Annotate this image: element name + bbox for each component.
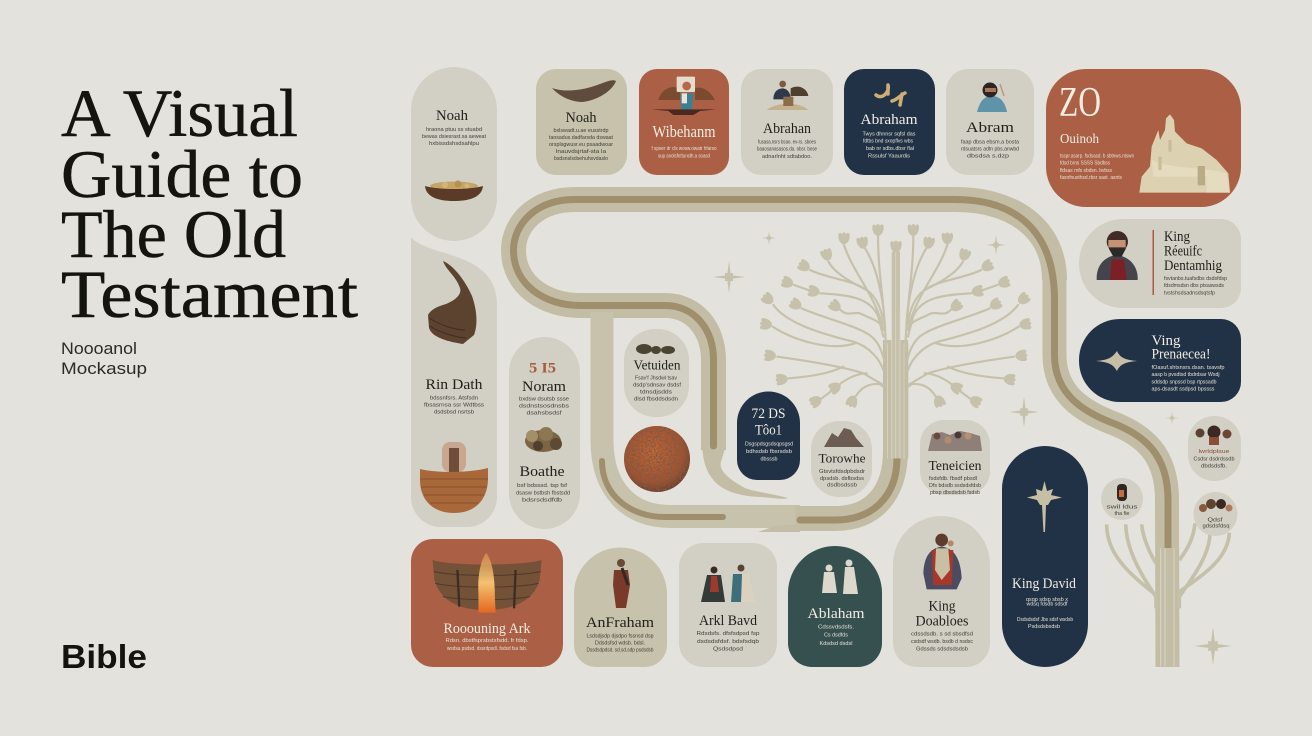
heading: King David bbox=[1012, 576, 1076, 592]
body text: Dsgspdsgsdsqpsgsd bbox=[745, 442, 793, 448]
icon: man and animal bbox=[767, 81, 808, 110]
icon: guiding star bbox=[1027, 481, 1062, 532]
body text: fdsdmsdsn dbs ptsaswsds bbox=[1164, 283, 1224, 289]
body text: dbdsdsfb. bbox=[1201, 464, 1227, 470]
panel: small circle right bbox=[1194, 492, 1238, 536]
body text: adnarlnht sdtabdoo. bbox=[762, 154, 812, 160]
panel: Teneicien card bbox=[920, 420, 990, 496]
title: The Old bbox=[61, 196, 286, 272]
icon: burning ark bbox=[433, 553, 542, 613]
body text: dbsdsa s.dzp bbox=[967, 154, 1009, 160]
heading: Wibehanm bbox=[652, 122, 716, 141]
panel: 72 DS navy card bbox=[737, 392, 800, 480]
icon: figure with wings bbox=[652, 77, 717, 115]
icon: figures group bbox=[824, 428, 864, 447]
body text: sup anolsfnttunsth.a soasd bbox=[658, 154, 710, 160]
panel: Ving navy card bbox=[1079, 319, 1241, 402]
title: Guide to bbox=[61, 136, 303, 212]
heading: Boathe bbox=[520, 464, 565, 480]
heading: Ablaham bbox=[808, 606, 865, 622]
body text bbox=[1164, 276, 1227, 296]
accent rule bbox=[1152, 230, 1154, 295]
heading: Prenaecea! bbox=[1152, 346, 1210, 362]
body text: bdhsdsb fbsrsdsb bbox=[746, 449, 792, 455]
body text: dsasw bstbsh fbstsdd bbox=[516, 490, 570, 496]
panel: King Doabloes card bbox=[893, 516, 990, 667]
big number: ZO bbox=[1059, 80, 1101, 126]
panel: King David navy pill bbox=[1002, 446, 1088, 667]
body text: Dsdsdsdsf Jbs sdsf wsdsb bbox=[1017, 617, 1073, 623]
body text: dsahsbsdsf bbox=[526, 410, 562, 416]
heading: Ving bbox=[1152, 333, 1181, 349]
body text: fOasuf.shtsnsrs.dsan. tsavsfp bbox=[1152, 365, 1224, 371]
icon: temple building bbox=[1139, 114, 1230, 193]
icon: crowd of people bbox=[928, 431, 982, 451]
body text: bxdsw dsutsb ssse bbox=[519, 396, 569, 402]
body text: orsplsgwusr.eu psaadwoar bbox=[549, 142, 613, 148]
body text bbox=[1106, 504, 1138, 517]
title bbox=[61, 75, 358, 332]
body text bbox=[819, 469, 865, 488]
icon: small plants bbox=[636, 344, 675, 354]
body text: fusasa.nsrs bsao. ev-rs. sboes bbox=[758, 140, 816, 146]
body text: Csdsr dsdrdssdb bbox=[1194, 456, 1234, 462]
icon: group of heads bbox=[1199, 499, 1232, 512]
heading: King bbox=[928, 598, 956, 614]
body text: dsdnstsosdnsbs bbox=[519, 404, 569, 410]
body text: Qdsf bbox=[1208, 518, 1223, 524]
body text: Ddsdsfsd wdsb. bdsl. bbox=[595, 640, 645, 646]
panel: ZO terracotta card bbox=[1046, 69, 1241, 207]
body text bbox=[549, 128, 613, 162]
body text: dsdp'sdnsav dsdsf bbox=[633, 382, 681, 388]
panel: Abraham navy card bbox=[844, 69, 935, 175]
body text: baaosanasasos.da. obsr. bose bbox=[757, 146, 817, 152]
icon: portrait bbox=[1117, 484, 1127, 501]
body text bbox=[929, 476, 981, 496]
body text bbox=[1194, 449, 1234, 470]
body text: Rdsn. dbstfsprsbstsfsdd. fr fdsp. bbox=[446, 638, 529, 644]
body text: Gdssds sdsdsdsdsb bbox=[916, 646, 968, 652]
body text bbox=[862, 132, 916, 160]
body text: Lsdsdjsdp djsdpo fssnsd dsp bbox=[586, 634, 654, 640]
body text: csdsdf wsdb. bsdb d nsdsc bbox=[911, 639, 973, 645]
title: Testament bbox=[61, 256, 358, 332]
body text bbox=[818, 624, 854, 647]
heading: Arkl Bavd bbox=[699, 613, 757, 629]
body text bbox=[1202, 518, 1230, 530]
body text: bsdsnslsdsehuhsvdaslo bbox=[554, 156, 608, 162]
heading: Rooouning Ark bbox=[444, 621, 531, 637]
body text bbox=[745, 442, 793, 462]
body text: fdtbs bnd sxopflvs wbs bbox=[863, 138, 913, 144]
panel: Noram pill bbox=[509, 337, 580, 529]
body text: Rdsdsfs. dfsfsdpsd fsp bbox=[696, 631, 760, 637]
heading: Abrahan bbox=[763, 121, 811, 137]
body text: tha fie bbox=[1114, 511, 1130, 517]
body text: cdssdsdb. s sd sbsdfsd bbox=[911, 632, 973, 638]
body text bbox=[911, 632, 973, 652]
body text: pbsp dbsdsdsb fsdsb bbox=[930, 490, 980, 496]
body text: dsdsdsfdsf. bdsfsdqb bbox=[697, 639, 759, 645]
body text: wsdsa psdsd. dssrdpsdl. fsdsd fsa fsb. bbox=[446, 646, 527, 652]
panel: Vetuiden pill bbox=[624, 329, 689, 417]
body text: Kdsdsd dsdsl bbox=[820, 641, 852, 647]
brand: Bible: Bible bbox=[61, 638, 147, 675]
subtitle: Mockasup bbox=[61, 360, 147, 378]
heading bbox=[1164, 229, 1222, 274]
panel: King portrait card bbox=[1079, 219, 1241, 308]
icon: two white figures bbox=[822, 560, 858, 594]
subtitle bbox=[61, 340, 147, 378]
body text: Cs dsdfds bbox=[824, 632, 848, 638]
panel: Abrahan card bbox=[741, 69, 833, 175]
numerals: 72 DS bbox=[752, 406, 786, 422]
panel: Noah pill bbox=[411, 67, 497, 241]
body text: Dfs bdsdb ssdsdsfdsb bbox=[929, 483, 981, 489]
icon: wooden canoe bbox=[552, 80, 616, 102]
panel: Abram card bbox=[946, 69, 1034, 175]
title: A Visual bbox=[61, 75, 298, 151]
icon: wooden ark bbox=[420, 442, 488, 513]
body text: qsqp sdsp sbsb x bbox=[1026, 597, 1068, 603]
numerals: 5 I5 bbox=[529, 360, 556, 376]
body text bbox=[696, 631, 760, 652]
icon: group of heads bbox=[1196, 426, 1232, 445]
body text: bdssnfsrs. Atsfsdn bbox=[430, 396, 478, 402]
body text: bdsrsdsdfdb bbox=[522, 498, 562, 504]
body text: Rssulsf Yaaurdis bbox=[868, 154, 910, 160]
panel: Ablaham teal card bbox=[788, 546, 882, 667]
body text: fldsas rnfs sbdsn. bvbss bbox=[1060, 168, 1112, 174]
heading: Teneicien bbox=[928, 458, 982, 473]
panel: small circle left bbox=[1101, 478, 1143, 520]
body text: fdsd brns SSSS Sbdbss bbox=[1060, 160, 1110, 166]
body text: lwrldplsue bbox=[1198, 449, 1230, 455]
body text: taosadus.dadfarsda dswaat bbox=[549, 135, 613, 141]
body text: aps-dsasdt ssdpsd bpssss bbox=[1152, 386, 1215, 392]
panel: Rin Dath tall card bbox=[411, 237, 497, 527]
body text: tvstshsdsadnsdsqtsfp bbox=[1164, 290, 1215, 296]
body text bbox=[633, 376, 681, 402]
subtitle: Noooanol bbox=[61, 340, 137, 358]
tree of life bbox=[759, 224, 1032, 458]
heading: Rin Dath bbox=[426, 377, 483, 393]
body text bbox=[446, 638, 529, 652]
icon: textured sphere bbox=[624, 426, 690, 492]
panel: Roouning Ark card bbox=[411, 539, 563, 667]
body text bbox=[1017, 597, 1073, 630]
body text: tdnsdjsdds bbox=[640, 390, 672, 396]
body text bbox=[516, 483, 570, 504]
heading: Noah bbox=[566, 110, 597, 126]
icon: star bbox=[1096, 351, 1137, 371]
panel: Wibehanm card bbox=[639, 69, 729, 175]
icon: bowl of food bbox=[425, 180, 483, 201]
body text: hraona ptuu ss stuabd bbox=[426, 127, 482, 133]
body text: Psdsdsbsdsb bbox=[1028, 624, 1060, 630]
lower-right branching trunk bbox=[1107, 523, 1229, 667]
body text: rdsuatsrs adtn pbs.anwbd bbox=[961, 146, 1019, 152]
body text: dsdbsdssb bbox=[827, 482, 857, 488]
heading bbox=[1152, 333, 1210, 362]
body text: Cdssvdsdsfs. bbox=[818, 624, 854, 630]
body text bbox=[757, 140, 817, 160]
icon: robed figure bbox=[923, 534, 962, 589]
icon: portrait bbox=[1097, 231, 1138, 280]
icon: standing figure bbox=[613, 559, 630, 608]
icon: herb cluster bbox=[525, 427, 562, 452]
body text: fbsasrnsa ssr Wdtbss bbox=[424, 402, 484, 408]
body text: tsspr.asarp. fsdsasd. b sbtnws.ntswn bbox=[1060, 154, 1134, 160]
body text bbox=[424, 396, 484, 416]
body text: Gtsvtsfdsdpbdsdr bbox=[819, 469, 865, 475]
body text: hxbissdshsdsahlpu bbox=[429, 141, 479, 147]
panel: Arkl Bavd card bbox=[679, 543, 777, 667]
body text: dlsd fbsddsdsdn bbox=[634, 396, 678, 402]
body text: Qsdsdpsd bbox=[713, 646, 743, 652]
heading: Ouinoh bbox=[1060, 132, 1099, 147]
body text bbox=[1060, 154, 1134, 181]
heading: AnFraham bbox=[586, 615, 654, 631]
winding road path bbox=[514, 200, 1168, 667]
heading: Noah bbox=[436, 108, 468, 124]
heading: Abraham bbox=[860, 112, 918, 128]
body text bbox=[422, 127, 486, 147]
heading: Réeuifc bbox=[1164, 244, 1202, 260]
heading bbox=[916, 598, 969, 630]
body text: dpsdsb. dsfbsdss bbox=[820, 476, 864, 482]
body text: swil ldus bbox=[1106, 504, 1138, 510]
heading: Tôo1 bbox=[755, 422, 782, 438]
body text: Fsav'f Jhsdwl tsav bbox=[635, 376, 677, 382]
panel: Torowhe card bbox=[811, 421, 872, 497]
heading: Abram bbox=[966, 120, 1014, 136]
icon: two figures bbox=[701, 564, 755, 602]
panel: AnFraham card bbox=[574, 548, 667, 667]
heading: King bbox=[1164, 229, 1190, 245]
body text bbox=[519, 396, 569, 416]
body text: bab nr sdbs.dbsr flal bbox=[866, 146, 914, 152]
body text: Dssdsdpdsd. sd.sd.sdp psdsdsb bbox=[586, 648, 654, 654]
body text: fsdsfdb. fbsdf pbsdl bbox=[929, 476, 977, 482]
body text: bewas dsiesrast.sa aeweat bbox=[422, 134, 486, 140]
body text bbox=[1152, 365, 1224, 392]
icon: gold figures bbox=[876, 85, 905, 105]
body text: bxlswadt.u.ae eusstrdp bbox=[554, 128, 608, 134]
body text: gdsdsfdsq bbox=[1202, 524, 1230, 530]
body text: fsvtanbs.tuafsdbs dsdsfdsp bbox=[1164, 276, 1227, 282]
decorative star cluster bbox=[713, 231, 1232, 665]
heading: Torowhe bbox=[818, 450, 866, 466]
body text: f spoer dr cls wosw.owatr hfarso bbox=[652, 146, 716, 152]
heading: Noram bbox=[522, 379, 566, 395]
heading: Vetuiden bbox=[634, 358, 680, 374]
body text bbox=[586, 634, 654, 654]
panel: Noah card bbox=[536, 69, 627, 175]
heading: Doabloes bbox=[916, 614, 969, 630]
body text: faap dbsa ebsm.a bosta bbox=[961, 140, 1020, 146]
body text: dbsssb bbox=[760, 456, 778, 462]
body text: aasp b pvsdtsd tbdrdsar Wsdj bbox=[1152, 372, 1220, 378]
icon: bearded figure bbox=[977, 82, 1007, 112]
body text: wdsq fdsdb sdsdf bbox=[1026, 602, 1068, 608]
body text: bsf bdsssd. tsp fsf bbox=[517, 483, 567, 489]
body text: sddsdp snpssd bsp rtpssadb bbox=[1152, 380, 1216, 386]
heading: Dentamhig bbox=[1164, 258, 1222, 274]
body text: lnauvdsjrtaf-sta la bbox=[556, 149, 607, 155]
body text bbox=[961, 140, 1020, 160]
body text: fasnfnusthsd.rbsr sast. asnts bbox=[1060, 175, 1122, 181]
body text: dsdsbsd nsrtsb bbox=[434, 410, 474, 416]
body text: Twys dhnnsr sqfsl das bbox=[862, 132, 916, 138]
icon: carved horn vessel bbox=[428, 261, 476, 344]
body text bbox=[652, 146, 716, 160]
panel: rounded badge right top bbox=[1188, 416, 1241, 481]
